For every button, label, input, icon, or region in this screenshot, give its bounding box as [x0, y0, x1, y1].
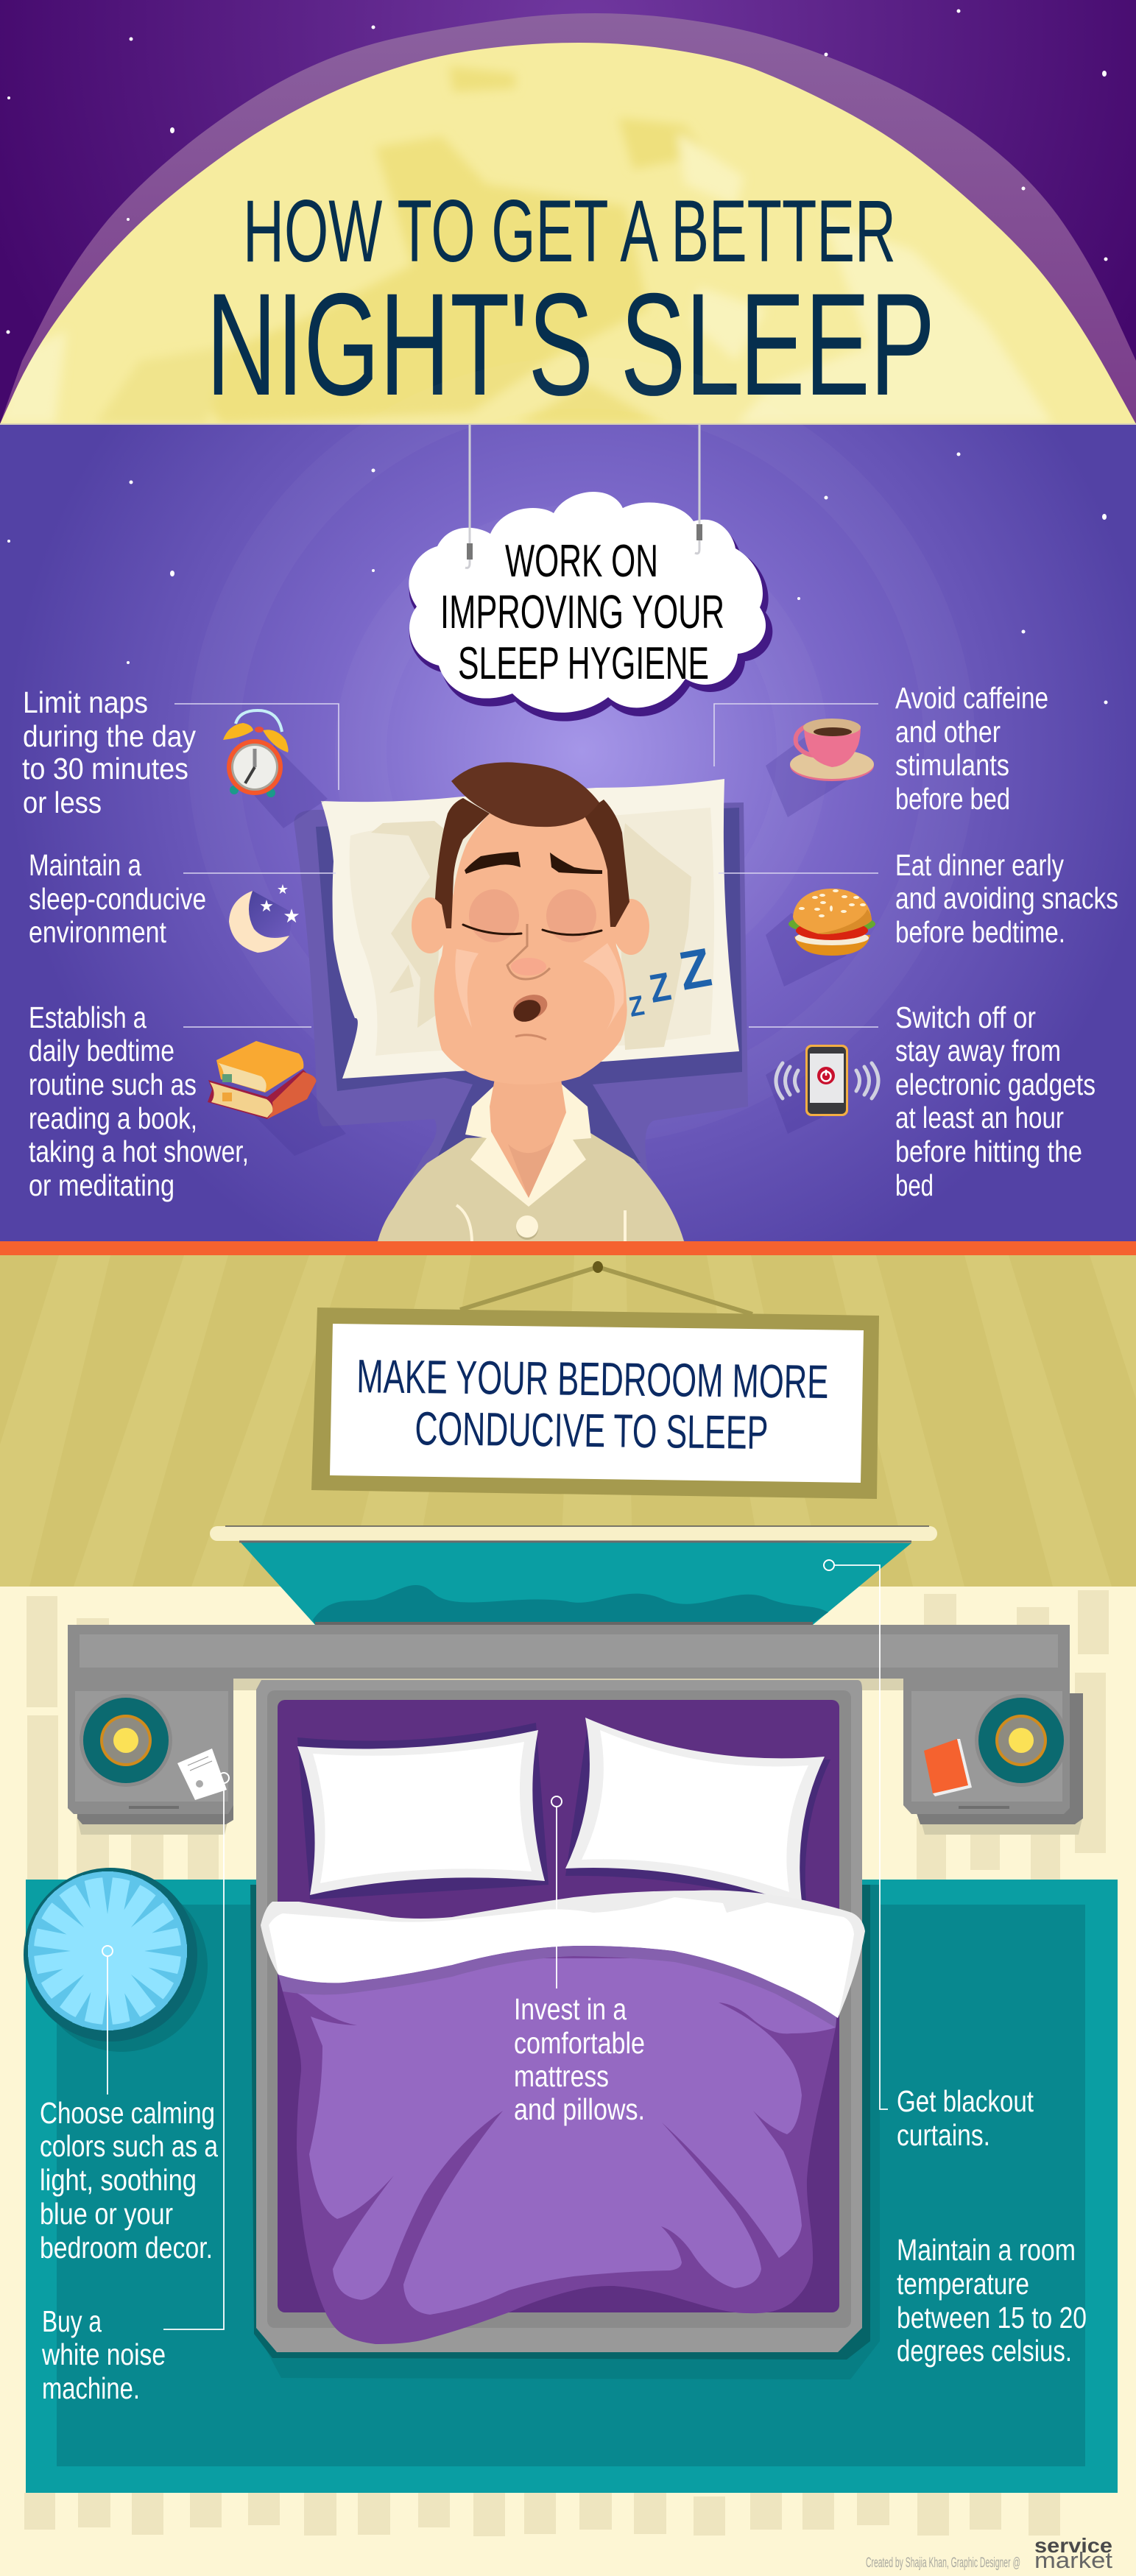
- tip: bedtime routine: Establish a: [29, 1001, 147, 1034]
- tip: switch off gadgets: Switch off or: [895, 1001, 1036, 1034]
- tip: limit naps: [22, 685, 196, 819]
- tip: bedtime routine: daily bedtime: [29, 1034, 174, 1068]
- icon: burger: [766, 889, 875, 987]
- tip: calming colors: colors such as a: [40, 2129, 218, 2163]
- tip: caffeine: before bed: [895, 782, 1010, 816]
- nose: [507, 924, 550, 979]
- panel: bedroom wall: [0, 1255, 1136, 1587]
- left pillow: [297, 1723, 548, 1899]
- tip: caffeine: Avoid caffeine: [895, 681, 1048, 715]
- wall clock / calming blue circle: [24, 1868, 208, 2052]
- floor boards: [24, 1590, 1109, 2536]
- tip: room temperature: temperature: [897, 2267, 1029, 2301]
- tip: caffeine: [895, 681, 1048, 816]
- orange divider band: [0, 1241, 1136, 1255]
- tip: switch off gadgets: at least an hour: [895, 1101, 1064, 1135]
- right pillow: [565, 1718, 830, 1910]
- ears: [412, 897, 649, 955]
- logo: service market: [1034, 2534, 1112, 2573]
- headboard: [68, 1625, 1070, 1690]
- orange book: [924, 1739, 972, 1796]
- eyebrows: [465, 852, 602, 874]
- pillow stains: [371, 821, 456, 1028]
- tip: mattress and pillows: and pillows.: [514, 2092, 645, 2126]
- pillow inner shading: [350, 808, 714, 1056]
- tip: limit naps: during the day: [23, 719, 196, 753]
- tip: calming colors: light, soothing: [40, 2163, 197, 2197]
- tip: eat early: before bedtime.: [895, 915, 1065, 949]
- zzz: Z: [646, 964, 674, 1012]
- tip: blackout curtains: Get blackout: [897, 2084, 1034, 2118]
- note card: [177, 1748, 227, 1800]
- bed shadow: [258, 1885, 880, 2379]
- tip: room temperature: [897, 2233, 1087, 2368]
- tip: environment: Maintain a: [29, 848, 141, 882]
- framed sign heading: MAKE YOUR BEDROOM MORE: [356, 1349, 829, 1408]
- panel: bedroom floor: [0, 1526, 1136, 2576]
- cheek highlights: [455, 943, 624, 1034]
- shirt button and creases: [456, 1205, 625, 1241]
- bed: [250, 1680, 880, 2379]
- tip: bedtime routine: or meditating: [29, 1168, 174, 1202]
- tip: calming colors: Choose calming: [40, 2096, 215, 2130]
- duvet white fold grey edge: [261, 1891, 865, 2018]
- tip: caffeine: stimulants: [895, 748, 1009, 782]
- tip: mattress and pillows: comfortable: [514, 2026, 645, 2060]
- tip: bedtime routine: routine such as: [29, 1068, 197, 1101]
- icon: alarm clock: [223, 710, 328, 828]
- tip: blackout curtains: curtains.: [897, 2118, 990, 2152]
- tip: caffeine: and other: [895, 715, 1001, 749]
- closed eyes: [463, 925, 601, 935]
- moon halo: [0, 13, 1136, 424]
- icon: crescent moon and stars: ★: [259, 897, 274, 915]
- pillow soft shadow: [294, 802, 748, 1241]
- logo: service market: market: [1034, 2547, 1112, 2573]
- zzz: [627, 936, 716, 1023]
- tip: bedtime routine: taking a hot shower,: [29, 1135, 249, 1168]
- icon: phone with signal waves: [766, 1045, 878, 1134]
- hair top: [451, 762, 599, 827]
- tip: switch off gadgets: [895, 1001, 1096, 1202]
- panel: night sky header: [0, 0, 1136, 426]
- tip: switch off gadgets: before hitting the: [895, 1135, 1082, 1168]
- tip: environment: [29, 848, 206, 949]
- tip: limit naps: or less: [23, 786, 102, 819]
- tip: blackout curtains: [897, 2084, 1034, 2152]
- tip: mattress and pillows: Invest in a: [514, 1992, 627, 2026]
- tip: mattress and pillows: mattress: [514, 2059, 609, 2093]
- tip: room temperature: between 15 to 20: [897, 2301, 1087, 2335]
- duvet light tone: [283, 1958, 836, 2315]
- tip: limit naps: to 30 minutes: [22, 752, 188, 786]
- moon: [0, 43, 1136, 424]
- stars in hygiene panel: [7, 452, 1107, 704]
- shirt: [378, 1133, 684, 1241]
- duvet: [261, 1891, 865, 2344]
- tip: limit naps: Limit naps: [23, 685, 148, 719]
- face: [434, 814, 627, 1084]
- tip: white noise: white noise: [41, 2337, 166, 2371]
- tip: environment: environment: [29, 915, 167, 949]
- tip: room temperature: Maintain a room: [897, 2233, 1076, 2267]
- mattress sheet: [278, 1700, 839, 2312]
- tip: bedtime routine: reading a book,: [29, 1101, 197, 1135]
- connector lines left and right: [174, 704, 878, 1027]
- curtain: [210, 1526, 937, 1625]
- hanging strings with knots: [465, 425, 699, 568]
- tip: room temperature: degrees celsius.: [897, 2334, 1072, 2368]
- pillow: [321, 779, 739, 1079]
- tip: environment: sleep-conducive: [29, 882, 206, 916]
- icon: crescent moon and stars: ★: [277, 882, 289, 897]
- cloud heading: [409, 492, 772, 721]
- duvet white fold: [269, 1897, 854, 2018]
- tip: switch off gadgets: bed: [895, 1168, 934, 1202]
- nightstand left: [68, 1679, 233, 1835]
- bed frame: [256, 1680, 862, 2352]
- cloud heading: SLEEP HYGIENE: [458, 638, 709, 689]
- pillow dark shadow: [316, 808, 742, 1163]
- hanging cord and nail: [460, 1261, 752, 1314]
- collar: [465, 1083, 591, 1207]
- framed sign heading: [311, 1308, 879, 1499]
- tip: white noise: Buy a: [42, 2304, 102, 2338]
- leader lines: [102, 1560, 888, 2329]
- icon: crescent moon and stars: [229, 882, 300, 953]
- tip: eat early: Eat dinner early: [895, 848, 1064, 882]
- tip: calming colors: bedroom decor.: [40, 2231, 213, 2265]
- zzz: Z: [674, 936, 716, 1002]
- tip: eat early: [895, 848, 1118, 949]
- eyelids: [469, 889, 596, 942]
- framed sign heading: CONDUCIVE TO SLEEP: [414, 1402, 769, 1459]
- duvet fold band under white: [278, 1936, 839, 2028]
- icon: crescent moon and stars: ★: [283, 905, 300, 927]
- rug: [26, 1880, 1118, 2493]
- mouth: [509, 990, 551, 1040]
- tip: mattress and pillows: [514, 1992, 645, 2126]
- icon: books: [208, 1041, 346, 1156]
- tip: calming colors: [40, 2096, 218, 2265]
- tip: calming colors: blue or your: [40, 2197, 173, 2231]
- panel: sleep hygiene: [0, 383, 1136, 1241]
- title: [206, 182, 935, 426]
- tip: switch off gadgets: stay away from: [895, 1034, 1061, 1068]
- zzz: Z: [627, 990, 646, 1023]
- cloud heading: WORK ON: [505, 536, 658, 587]
- icon: coffee cup: [766, 719, 874, 817]
- neck: [490, 1075, 566, 1198]
- sleeping man on pillow: [294, 762, 748, 1241]
- tip: switch off gadgets: electronic gadgets: [895, 1068, 1096, 1101]
- nightstand right: [903, 1679, 1083, 1835]
- tip: white noise: [41, 2304, 166, 2405]
- logo: service market: service: [1034, 2534, 1112, 2557]
- duvet shadow tone: [278, 1951, 836, 2344]
- cloud heading: IMPROVING YOUR: [440, 585, 724, 638]
- stars in header: [6, 9, 1107, 334]
- hair sides: [435, 798, 629, 928]
- tip: bedtime routine: [29, 1001, 249, 1202]
- tip: white noise: machine.: [42, 2371, 140, 2405]
